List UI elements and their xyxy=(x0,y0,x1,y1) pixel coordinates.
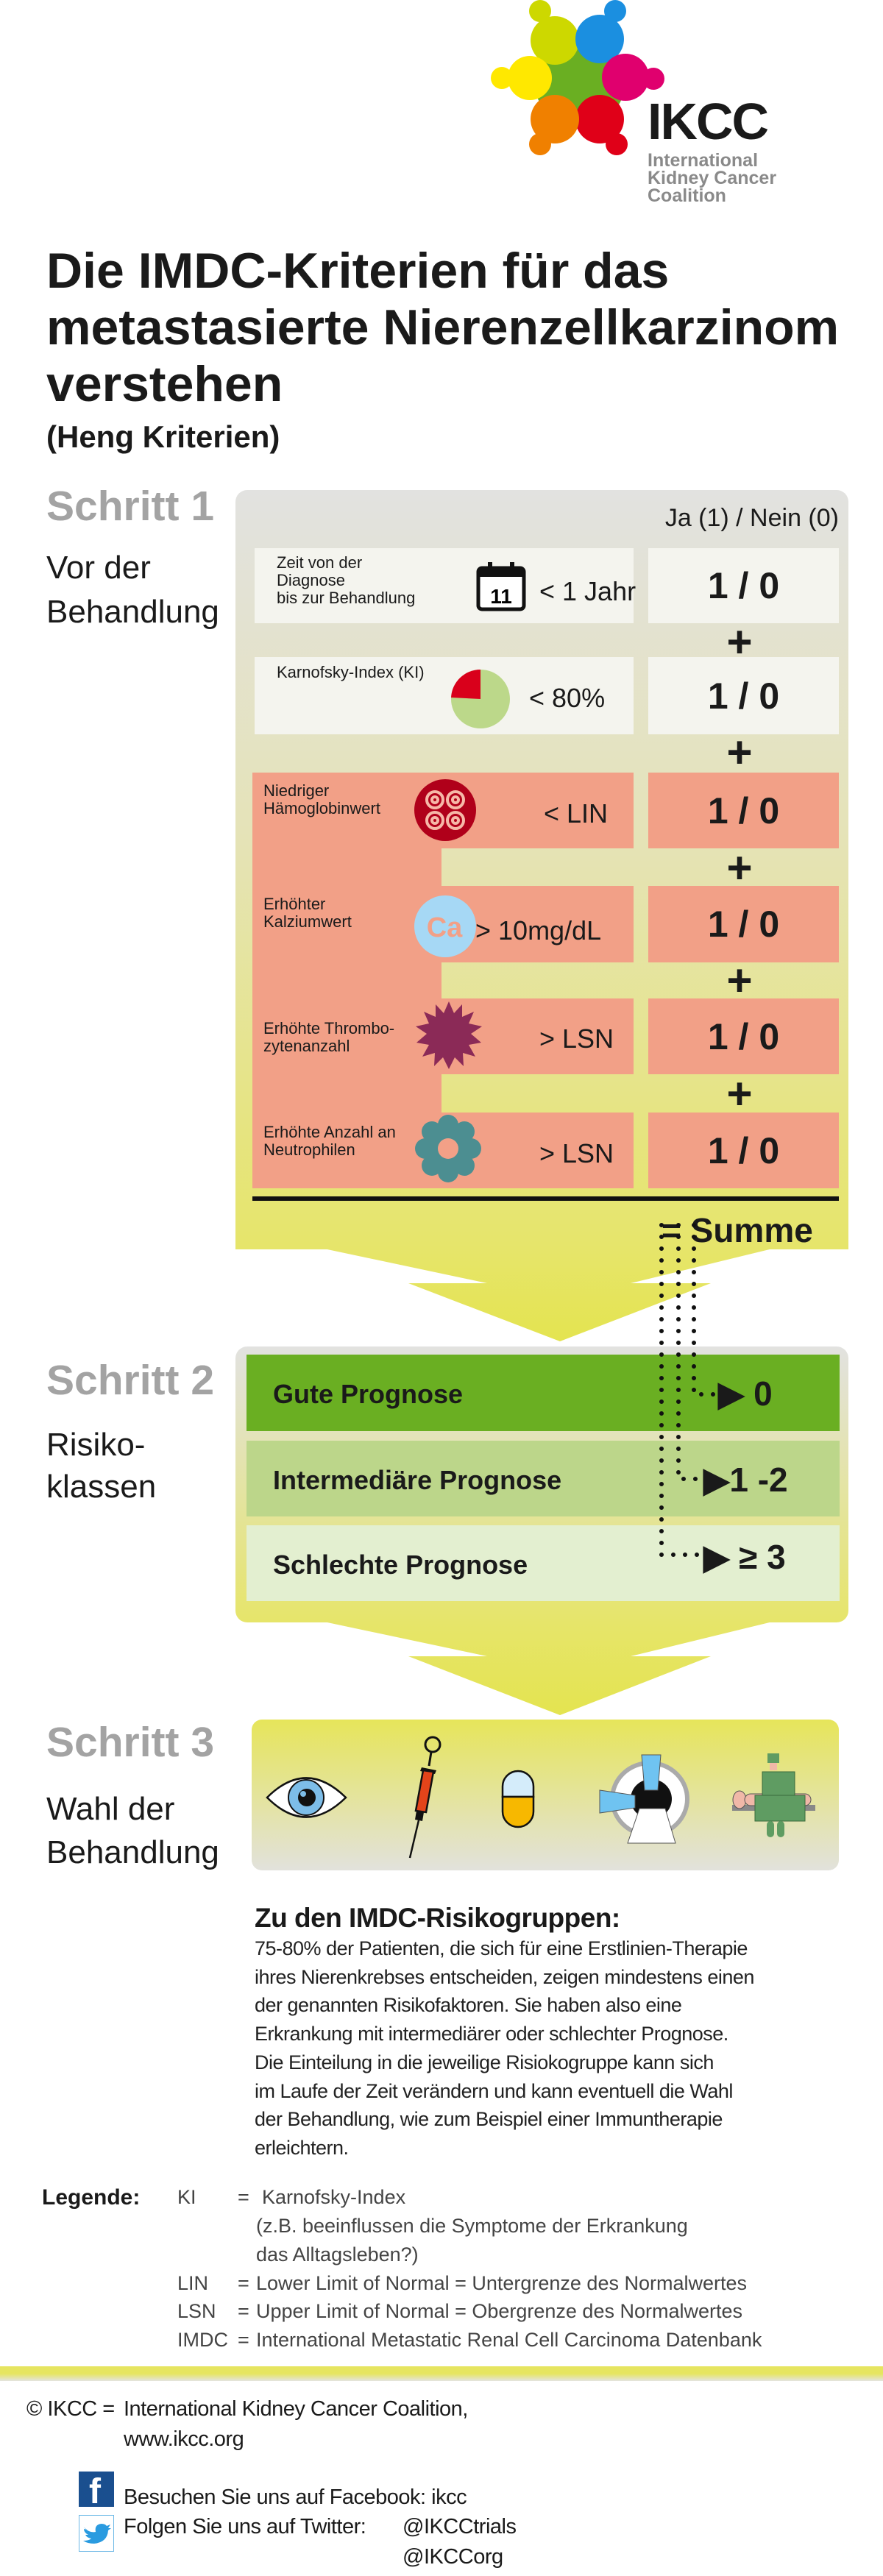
icon: calcium xyxy=(414,895,476,957)
step 3 label: Wahl der xyxy=(46,1791,174,1827)
icon: MRI scanner xyxy=(600,1755,687,1843)
row: Zeit xyxy=(255,548,634,623)
row: Neutrophile: > LSN xyxy=(539,1138,614,1168)
row: Kalzium: Kalziumwert xyxy=(263,912,352,931)
info text: der Behandlung, wie zum Beispiel einer Immuntherapie xyxy=(255,2108,723,2130)
text: 1 / 0 xyxy=(708,565,779,606)
step 3 label: Behandlung xyxy=(46,1834,219,1870)
icon: facebook: f xyxy=(89,2472,101,2511)
row: Neutrophile: Neutrophilen xyxy=(263,1140,355,1159)
icon: hemoglobin xyxy=(414,779,476,841)
legend: IMDC xyxy=(177,2329,228,2351)
logo subtitle: Coalition xyxy=(648,185,726,206)
salmon spine xyxy=(252,773,442,1188)
logo text IKCC: IKCC xyxy=(648,93,767,150)
legend: Lower Limit of Normal = Untergrenze des Normalwertes xyxy=(256,2272,747,2294)
info text: erleichtern. xyxy=(255,2137,349,2159)
info text: Die Einteilung in die jeweilige Risiokogruppe kann sich xyxy=(255,2051,714,2073)
row: Kalzium: Erhöhter xyxy=(263,895,325,913)
twitter text: Folgen Sie uns auf Twitter: xyxy=(124,2515,366,2538)
icon: twitter xyxy=(79,2515,114,2552)
risk: poor: Schlechte Prognose xyxy=(273,1550,528,1580)
legend: International Metastatic Renal Cell Carcinoma Datenbank xyxy=(256,2329,762,2351)
title: verstehen xyxy=(46,356,283,412)
icon: pie xyxy=(451,670,510,728)
row: Thrombozyten xyxy=(252,998,634,1074)
row: Hämoglobin: < LIN xyxy=(544,798,608,828)
step 2 label: Risiko- xyxy=(46,1427,145,1463)
info text: im Laufe der Zeit verändern und kann eventuell die Wahl xyxy=(255,2080,733,2102)
subtitle: (Heng Kriterien) xyxy=(46,419,280,454)
row: Hämoglobin xyxy=(252,773,634,848)
step 1 label: Vor der xyxy=(46,550,151,586)
logo xyxy=(491,0,776,206)
legend: (z.B. beeinflussen die Symptome der Erkrankung xyxy=(256,2215,688,2237)
row: Karnofsky: Karnofsky-Index (KI) xyxy=(277,663,425,681)
icon: syringe xyxy=(410,1737,440,1858)
panel: step 1 criteria xyxy=(235,490,848,1249)
icon: calendar: 11 xyxy=(490,585,512,608)
title xyxy=(46,243,839,412)
legend: Legende: xyxy=(42,2185,140,2210)
row: Zeit: bis zur Behandlung xyxy=(277,589,415,607)
info heading: Zu den IMDC-Risikogruppen: xyxy=(255,1903,620,1933)
row: Neutrophile: Erhöhte Anzahl an xyxy=(263,1123,396,1141)
row: Thrombozyten: Erhöhte Thrombo- xyxy=(263,1019,394,1037)
step 1 label: Behandlung xyxy=(46,594,219,630)
step 1 label xyxy=(46,483,219,630)
row: Hämoglobin: Hämoglobinwert xyxy=(263,799,380,817)
step 1 label: Schritt 1 xyxy=(46,483,214,530)
text: + xyxy=(726,617,753,667)
logo subtitle xyxy=(648,150,776,206)
panel: step 3 treatment xyxy=(252,1720,839,1870)
logo subtitle: International xyxy=(648,150,758,171)
step 3 label xyxy=(46,1719,219,1870)
header Ja/Nein: Ja (1) / Nein (0) xyxy=(665,504,839,532)
risk: intermediate xyxy=(247,1441,840,1516)
row: Karnofsky xyxy=(255,657,634,734)
icon: pill xyxy=(503,1771,533,1827)
dotted connectors xyxy=(659,1223,715,1557)
arrow 2 xyxy=(327,1622,770,1715)
legend: LSN xyxy=(177,2300,216,2322)
info text: der genannten Risikofaktoren. Sie haben also eine xyxy=(255,1994,681,2016)
text: 1 / 0 xyxy=(708,790,779,831)
legend: = xyxy=(238,2272,249,2294)
text: + xyxy=(726,728,753,777)
icon: facebook xyxy=(79,2472,114,2507)
legend: = xyxy=(238,2300,249,2322)
sum label: = Summe xyxy=(662,1211,813,1249)
risk: poor xyxy=(247,1525,840,1601)
text: 1 / 0 xyxy=(708,675,779,717)
text: + xyxy=(726,1069,753,1118)
copyright xyxy=(26,2397,468,2451)
icon: surgeon xyxy=(732,1753,815,1837)
icon: neutrophil xyxy=(415,1115,481,1182)
panel: step 2 risk classes xyxy=(235,1346,848,1622)
icon: platelet star xyxy=(416,1001,482,1069)
row: Kalzium: > 10mg/dL xyxy=(475,915,601,945)
twitter text xyxy=(124,2515,516,2569)
footer band xyxy=(0,2366,883,2381)
legend: = xyxy=(238,2186,249,2208)
twitter text: @IKCCorg xyxy=(403,2545,503,2569)
row: Zeit: Diagnose xyxy=(277,571,345,589)
arrow 1 xyxy=(327,1249,770,1341)
legend: das Alltagsleben?) xyxy=(256,2243,419,2265)
text: + xyxy=(726,843,753,893)
twitter text: @IKCCtrials xyxy=(403,2515,516,2538)
text: 1 / 0 xyxy=(708,1130,779,1171)
title: metastasierte Nierenzellkarzinom xyxy=(46,299,839,355)
row: Hämoglobin: Niedriger xyxy=(263,781,329,800)
row: Thrombozyten: zytenanzahl xyxy=(263,1037,350,1055)
facebook text: Besuchen Sie uns auf Facebook: ikcc xyxy=(124,2485,467,2509)
info text xyxy=(255,1937,754,2159)
step 2 label: klassen xyxy=(46,1469,156,1505)
step 2 label xyxy=(46,1357,214,1505)
risk: good: ▶ 0 xyxy=(718,1374,773,1413)
legend: = xyxy=(238,2329,249,2351)
copyright: International Kidney Cancer Coalition, xyxy=(124,2397,468,2421)
legend xyxy=(42,2185,762,2351)
copyright: © IKCC = xyxy=(26,2397,115,2421)
legend: Karnofsky-Index xyxy=(262,2186,405,2208)
icon: eye xyxy=(267,1778,346,1817)
title: Die IMDC-Kriterien für das xyxy=(46,243,669,299)
logo subtitle: Kidney Cancer xyxy=(648,168,776,188)
text: + xyxy=(726,956,753,1005)
info text: ihres Nierenkrebses entscheiden, zeigen mindestens einen xyxy=(255,1966,754,1988)
icon: logo circles xyxy=(491,0,664,155)
legend: KI xyxy=(177,2186,196,2208)
risk: good: Gute Prognose xyxy=(273,1379,463,1409)
row: Neutrophile xyxy=(252,1113,634,1188)
text: 1 / 0 xyxy=(708,904,779,945)
risk: poor: ▶ ≥ 3 xyxy=(703,1538,786,1576)
row: Kalzium xyxy=(252,886,634,962)
row: Karnofsky: < 80% xyxy=(529,683,605,713)
info text: 75-80% der Patienten, die sich für eine Erstlinien-Therapie xyxy=(255,1937,748,1959)
risk: good xyxy=(247,1355,840,1431)
row: Zeit: < 1 Jahr xyxy=(539,576,636,606)
text: 1 / 0 xyxy=(708,1015,779,1057)
step 2 label: Schritt 2 xyxy=(46,1357,214,1404)
info text: Erkrankung mit intermediärer oder schlechter Prognose. xyxy=(255,2023,728,2045)
row: Zeit: Zeit von der xyxy=(277,553,362,572)
icon: calcium: Ca xyxy=(427,912,463,943)
sum line xyxy=(252,1196,839,1201)
icon: calendar xyxy=(477,562,525,611)
step 3 label: Schritt 3 xyxy=(46,1719,214,1766)
risk: intermediate: ▶1 -2 xyxy=(703,1461,788,1499)
legend: LIN xyxy=(177,2272,208,2294)
risk: intermediate: Intermediäre Prognose xyxy=(273,1465,561,1495)
legend: Upper Limit of Normal = Obergrenze des Normalwertes xyxy=(256,2300,742,2322)
copyright: www.ikcc.org xyxy=(124,2427,244,2451)
row: Thrombozyten: > LSN xyxy=(539,1023,614,1054)
